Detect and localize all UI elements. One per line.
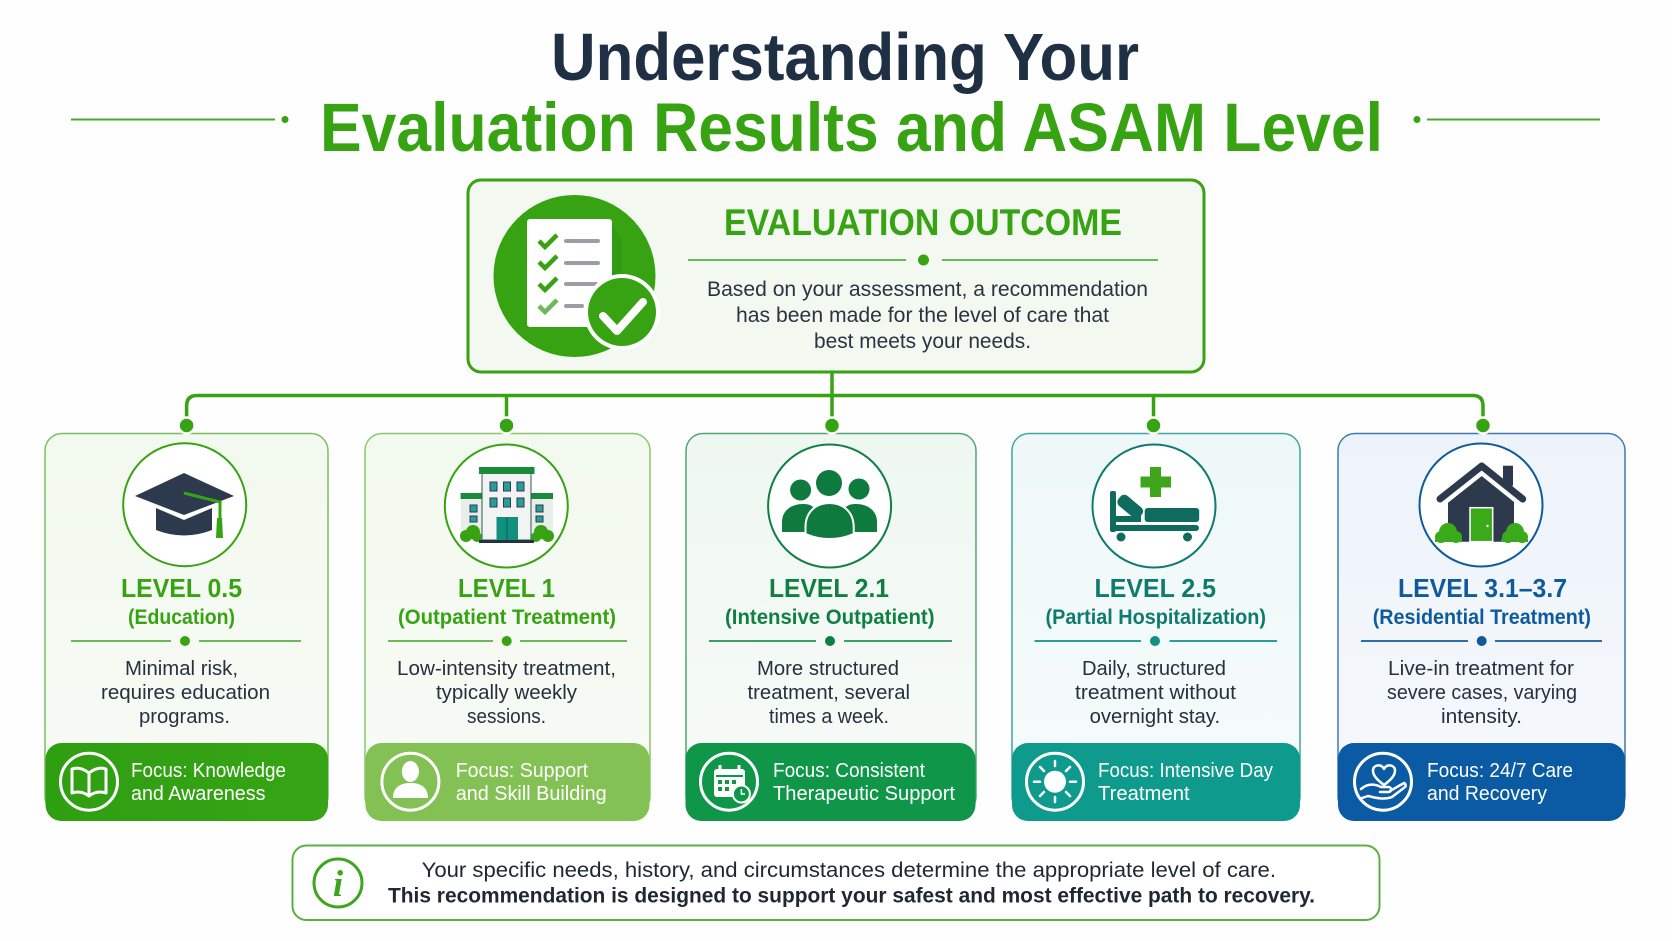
panel: level 0.5: (Education) <box>128 605 235 629</box>
focus band <box>46 743 328 821</box>
level heading: LEVEL 0.5 <box>121 573 242 603</box>
panel: level 3.1-3.7: (Residential Treatment) <box>1373 605 1591 629</box>
icon: checklist <box>494 195 660 357</box>
level description: Minimal risk, <box>125 658 238 680</box>
level description: Daily, structured <box>1082 658 1226 680</box>
icon: info: i <box>333 864 344 905</box>
level description: requires education <box>101 682 270 704</box>
level description <box>101 658 270 728</box>
level heading: LEVEL 1 <box>458 573 555 603</box>
title <box>71 20 1600 166</box>
icon: hospital building <box>445 444 568 568</box>
focus band <box>686 743 976 821</box>
level description: Low-intensity treatment, <box>397 658 616 680</box>
note text <box>388 859 1315 908</box>
connector dots <box>179 418 1491 434</box>
focus band: Focus: Consistent <box>773 760 925 782</box>
outcome description: Based on your assessment, a recommendation <box>707 277 1148 301</box>
icon: hospital bed <box>1092 444 1216 568</box>
icon: calendar and clock <box>714 765 750 802</box>
level heading: LEVEL 2.5 <box>1094 573 1216 603</box>
level heading: LEVEL 3.1–3.7 <box>1398 573 1567 603</box>
panel: level 1 <box>365 434 650 821</box>
level description: intensity. <box>1441 706 1522 728</box>
icon: group of people <box>768 444 891 568</box>
title: Evaluation Results and ASAM Level <box>320 89 1383 166</box>
panel: level 2.5: (Partial Hospitalization) <box>1046 605 1266 629</box>
note text: Your specific needs, history, and circumstances determine the appropriate level of care. <box>422 859 1276 882</box>
focus band <box>366 743 650 821</box>
panel: level 2.1: (Intensive Outpatient) <box>725 605 934 629</box>
panel: level 2.5 <box>1012 434 1300 821</box>
level description: Live-in treatment for <box>1388 658 1574 680</box>
outcome description: best meets your needs. <box>814 329 1031 353</box>
focus band: Focus: Knowledge <box>131 760 286 782</box>
note text: This recommendation is designed to support your safest and most effective path to recovery. <box>388 885 1315 908</box>
level heading: LEVEL 2.1 <box>769 573 889 603</box>
level description <box>1075 658 1236 728</box>
title: Understanding Your <box>551 20 1139 95</box>
connector lines <box>187 373 1483 424</box>
focus band <box>1012 743 1300 821</box>
focus band: and Awareness <box>131 783 266 805</box>
icon: book <box>72 768 106 796</box>
level description: times a week. <box>769 706 889 728</box>
panel: evaluation outcome <box>468 180 1204 372</box>
level description: severe cases, varying <box>1387 682 1577 704</box>
level description: programs. <box>139 706 230 728</box>
level description <box>748 658 910 728</box>
icon: graduation cap <box>123 443 246 566</box>
level description <box>397 658 616 728</box>
level description: overnight stay. <box>1090 706 1220 728</box>
icon: house <box>1420 444 1542 566</box>
focus band: Treatment <box>1098 783 1190 805</box>
focus band: Therapeutic Support <box>773 783 955 805</box>
focus band: and Recovery <box>1427 783 1547 805</box>
focus band: Focus: Support <box>456 760 589 782</box>
heading: evaluation outcome: EVALUATION OUTCOME <box>724 202 1122 243</box>
level description: treatment without <box>1075 682 1236 704</box>
outcome description: has been made for the level of care that <box>736 303 1109 327</box>
panel: level 2.1 <box>686 434 976 821</box>
level description <box>1387 658 1577 728</box>
icon: sun <box>1034 761 1076 802</box>
panel: level 1: (Outpatient Treatment) <box>398 605 616 629</box>
focus band: and Skill Building <box>456 783 607 805</box>
icon: hand holding heart <box>1361 765 1406 799</box>
callout: note <box>292 846 1380 920</box>
panel: level 0.5 <box>45 434 328 821</box>
focus band <box>1338 743 1625 821</box>
focus band: Focus: 24/7 Care <box>1427 760 1573 782</box>
icon: person <box>393 761 428 798</box>
level description: treatment, several <box>748 682 910 704</box>
focus band: Focus: Intensive Day <box>1098 760 1273 782</box>
level description: sessions. <box>467 706 546 728</box>
outcome description <box>707 277 1148 353</box>
panel: level 3.1-3.7 <box>1338 434 1625 821</box>
icon: info <box>314 859 362 907</box>
level description: More structured <box>757 658 899 680</box>
level description: typically weekly <box>436 682 577 704</box>
